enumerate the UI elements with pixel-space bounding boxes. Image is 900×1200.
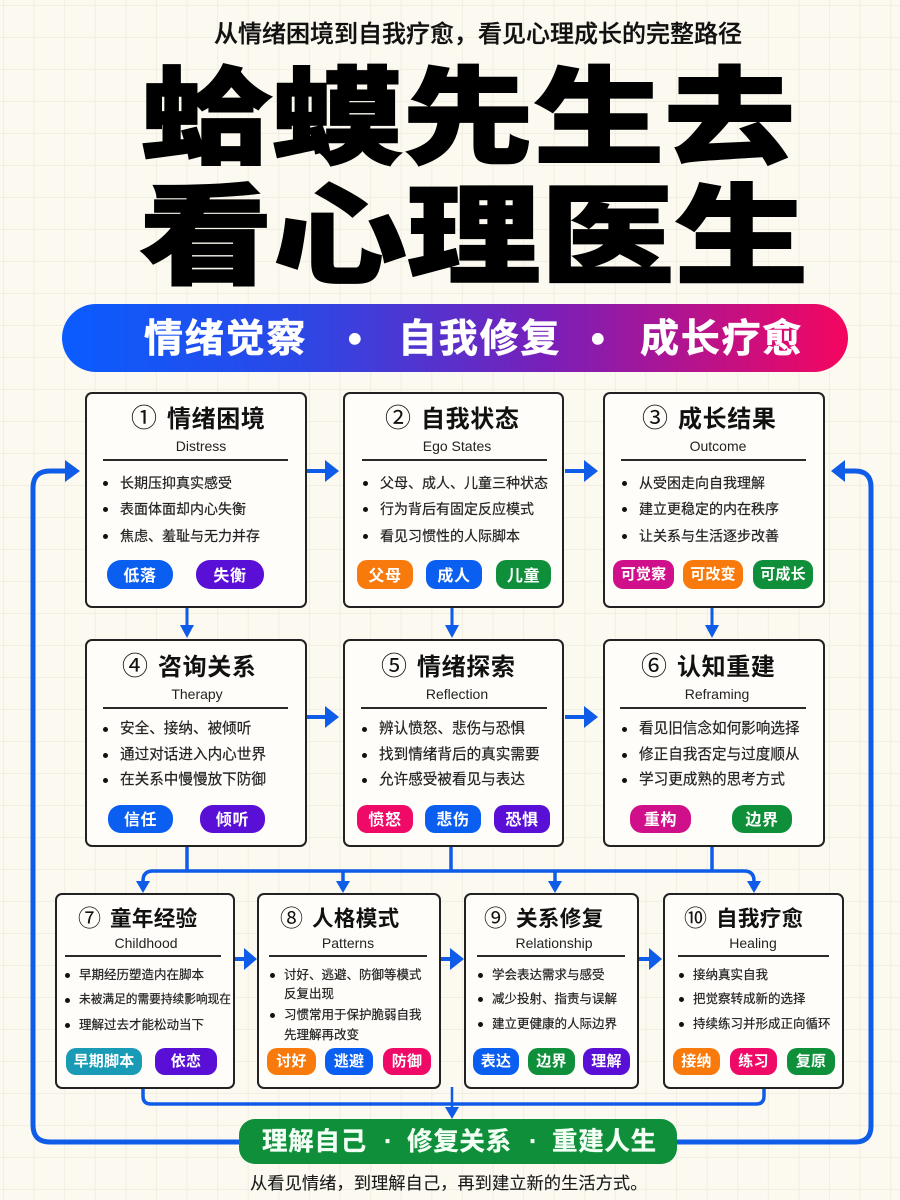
summary banner: 修复关系 [407, 1128, 512, 1156]
bullet: 修正自我否定与过度顺从 [639, 747, 800, 763]
panel: 10 healing [663, 893, 844, 1089]
bullet [270, 965, 422, 1004]
tag: 早期脚本 [74, 1053, 134, 1070]
tag: 依恋 [171, 1053, 201, 1070]
bullet: 安全、接纳、被倾听 [120, 721, 251, 737]
panel: 6 reframing [603, 639, 825, 847]
english subtitle: Childhood [114, 935, 178, 951]
arrow: 9 to 10 [639, 948, 662, 970]
arrow: 8 to 9 [441, 948, 464, 970]
heading: ⑩ 自我疗愈 [684, 905, 804, 931]
bullet [270, 1005, 422, 1045]
tag: 失衡 [213, 568, 247, 584]
summary banner: 重建人生 [552, 1128, 657, 1156]
tag [613, 560, 674, 589]
tag: 复原 [796, 1053, 826, 1070]
arrow: 3 to 6 [705, 608, 719, 638]
bullet: 辨认愤怒、悲伤与恐惧 [379, 721, 525, 737]
tag: 愤怒 [368, 812, 402, 829]
panel: 4 therapy [85, 639, 307, 847]
bullet: 看见习惯性的人际脚本 [380, 528, 520, 544]
heading: ③ 成长结果 [642, 403, 776, 433]
heading: ⑤ 情绪探索 [381, 651, 515, 681]
tag [673, 1048, 720, 1075]
heading: ⑨ 关系修复 [484, 905, 604, 931]
bullet: 接纳真实自我 [693, 968, 768, 982]
tag [267, 1048, 316, 1075]
bullet: 焦虑、羞耻与无力并存 [120, 528, 260, 544]
arrow: 7 to 8 [235, 948, 257, 970]
heading: ⑥ 认知重建 [641, 651, 775, 681]
tag [357, 805, 413, 833]
tag [383, 1048, 431, 1075]
tag [357, 560, 413, 589]
tag: 接纳 [681, 1053, 712, 1070]
tag: 成人 [437, 568, 471, 584]
summary banner: 理解自己 [262, 1128, 367, 1156]
panel: 7 childhood [55, 893, 235, 1089]
tag: 练习 [738, 1053, 769, 1070]
panel: 8 patterns [257, 893, 441, 1089]
panel: 1 distress [85, 392, 307, 608]
arrow: 5 to 6 [565, 706, 598, 728]
english subtitle: Distress [176, 438, 226, 454]
tag: 可成长 [760, 566, 806, 583]
bullet: 减少投射、指责与误解 [492, 992, 617, 1006]
tag: 可改变 [690, 566, 736, 583]
english subtitle: Ego States [423, 438, 491, 454]
tag: 倾听 [216, 812, 249, 829]
panel: 2 ego states [343, 392, 564, 608]
banner: three themes: 自我修复 [398, 318, 561, 361]
bullet: 未被满足的需要持续影响现在 [79, 993, 231, 1006]
arrow: row two into row three [136, 847, 761, 893]
english subtitle: Outcome [690, 438, 746, 454]
bullet: 早期经历塑造内在脚本 [79, 968, 204, 982]
bullet: 表面体面却内心失衡 [120, 501, 246, 517]
bullet: 学习更成熟的思考方式 [639, 772, 785, 788]
tag: 表达 [481, 1053, 511, 1070]
tag: 父母 [368, 568, 402, 584]
heading: ④ 咨询关系 [122, 651, 256, 681]
tag [196, 560, 264, 589]
bullet: 允许感受被看见与表达 [379, 772, 525, 788]
tag: 信任 [124, 812, 157, 829]
arrow: 2 to 3 [565, 460, 598, 482]
tag: 重构 [644, 812, 677, 829]
panel: 5 reflection [343, 639, 564, 847]
banner: three themes: • [591, 318, 605, 361]
tag: 儿童 [507, 568, 540, 584]
tag [200, 805, 265, 833]
banner: three themes: 成长疗愈 [640, 318, 803, 361]
tag [683, 560, 743, 589]
bullet: 理解过去才能松动当下 [79, 1018, 204, 1032]
english subtitle: Patterns [322, 935, 374, 951]
tag [583, 1048, 630, 1075]
tag: 边界 [745, 812, 779, 829]
tag [426, 560, 482, 589]
english subtitle: Therapy [171, 686, 223, 702]
heading: ② 自我状态 [385, 403, 519, 433]
arrow: row three into summary [143, 1087, 764, 1119]
tag [425, 805, 481, 833]
arrow: 2 to 5 [445, 608, 459, 638]
arrow: 1 to 4 [180, 608, 194, 638]
panel: 3 outcome [603, 392, 825, 608]
tag: 低落 [123, 568, 157, 584]
tag: 悲伤 [436, 812, 470, 829]
tag [753, 560, 813, 589]
heading: ⑧ 人格模式 [280, 905, 400, 931]
heading: ① 情绪困境 [131, 403, 265, 433]
banner: three themes: • [348, 318, 362, 361]
title line 1: 蛤蟆先生去 [141, 60, 795, 178]
banner: three themes: 情绪觉察 [144, 318, 307, 361]
tag: 逃避 [334, 1053, 364, 1070]
bullet: 行为背后有固定反应模式 [380, 501, 534, 517]
tag [108, 805, 173, 833]
tag [66, 1048, 142, 1075]
bullet: 学会表达需求与感受 [492, 968, 605, 982]
summary banner: · [529, 1128, 538, 1156]
bullet: 找到情绪背后的真实需要 [379, 747, 540, 763]
summary banner [239, 1119, 677, 1164]
panel: 9 relationship [464, 893, 639, 1089]
tag [325, 1048, 373, 1075]
bullet: 持续练习并形成正向循环 [693, 1017, 831, 1031]
footer caption: 从看见情绪，到理解自己，再到建立新的生活方式。 [250, 1173, 647, 1193]
tag [107, 560, 173, 589]
summary banner: · [384, 1128, 392, 1156]
bullet: 在关系中慢慢放下防御 [120, 772, 266, 788]
english subtitle: Reframing [685, 686, 749, 702]
arrow: feedback loop left [33, 460, 240, 1142]
tag [473, 1048, 519, 1075]
arrow: 4 to 5 [307, 706, 339, 728]
tag: 防御 [392, 1053, 422, 1070]
bullet: 先理解再改变 [284, 1028, 359, 1042]
tag: 恐惧 [505, 812, 539, 829]
bullet: 看见旧信念如何影响选择 [639, 721, 800, 737]
bullet: 建立更稳定的内在秩序 [639, 501, 779, 517]
english subtitle: Healing [729, 935, 777, 951]
tag [528, 1048, 575, 1075]
tag [787, 1048, 835, 1075]
heading: ⑦ 童年经验 [78, 905, 198, 931]
title line 2: 看心理医生 [139, 177, 808, 299]
tag: 讨好 [276, 1053, 307, 1070]
tag: 可觉察 [621, 566, 666, 583]
bullet: 让关系与生活逐步改善 [639, 528, 779, 544]
bullet: 讨好、逃避、防御等模式 [284, 968, 422, 982]
bullet: 反复出现 [284, 987, 334, 1001]
tag [730, 1048, 777, 1075]
bullet: 通过对话进入内心世界 [120, 747, 266, 763]
tag: 边界 [536, 1053, 567, 1070]
banner: three themes [62, 304, 848, 372]
bullet: 习惯常用于保护脆弱自我 [284, 1008, 422, 1022]
tag: 理解 [591, 1053, 622, 1070]
bullet: 长期压抑真实感受 [120, 475, 232, 491]
bullet: 建立更健康的人际边界 [492, 1017, 617, 1031]
tag [496, 560, 551, 589]
subtitle: 从情绪困境到自我疗愈，看见心理成长的完整路径 [214, 21, 742, 48]
english subtitle: Reflection [426, 686, 488, 702]
tag [630, 805, 691, 833]
tag [155, 1048, 217, 1075]
arrow: feedback loop right [677, 460, 871, 1142]
tag [494, 805, 550, 833]
english subtitle: Relationship [515, 935, 593, 951]
tag [732, 805, 792, 833]
arrow: 1 to 2 [307, 460, 339, 482]
bullet: 把觉察转成新的选择 [693, 992, 806, 1006]
bullet: 父母、成人、儿童三种状态 [380, 475, 548, 491]
bullet: 从受困走向自我理解 [639, 475, 765, 491]
